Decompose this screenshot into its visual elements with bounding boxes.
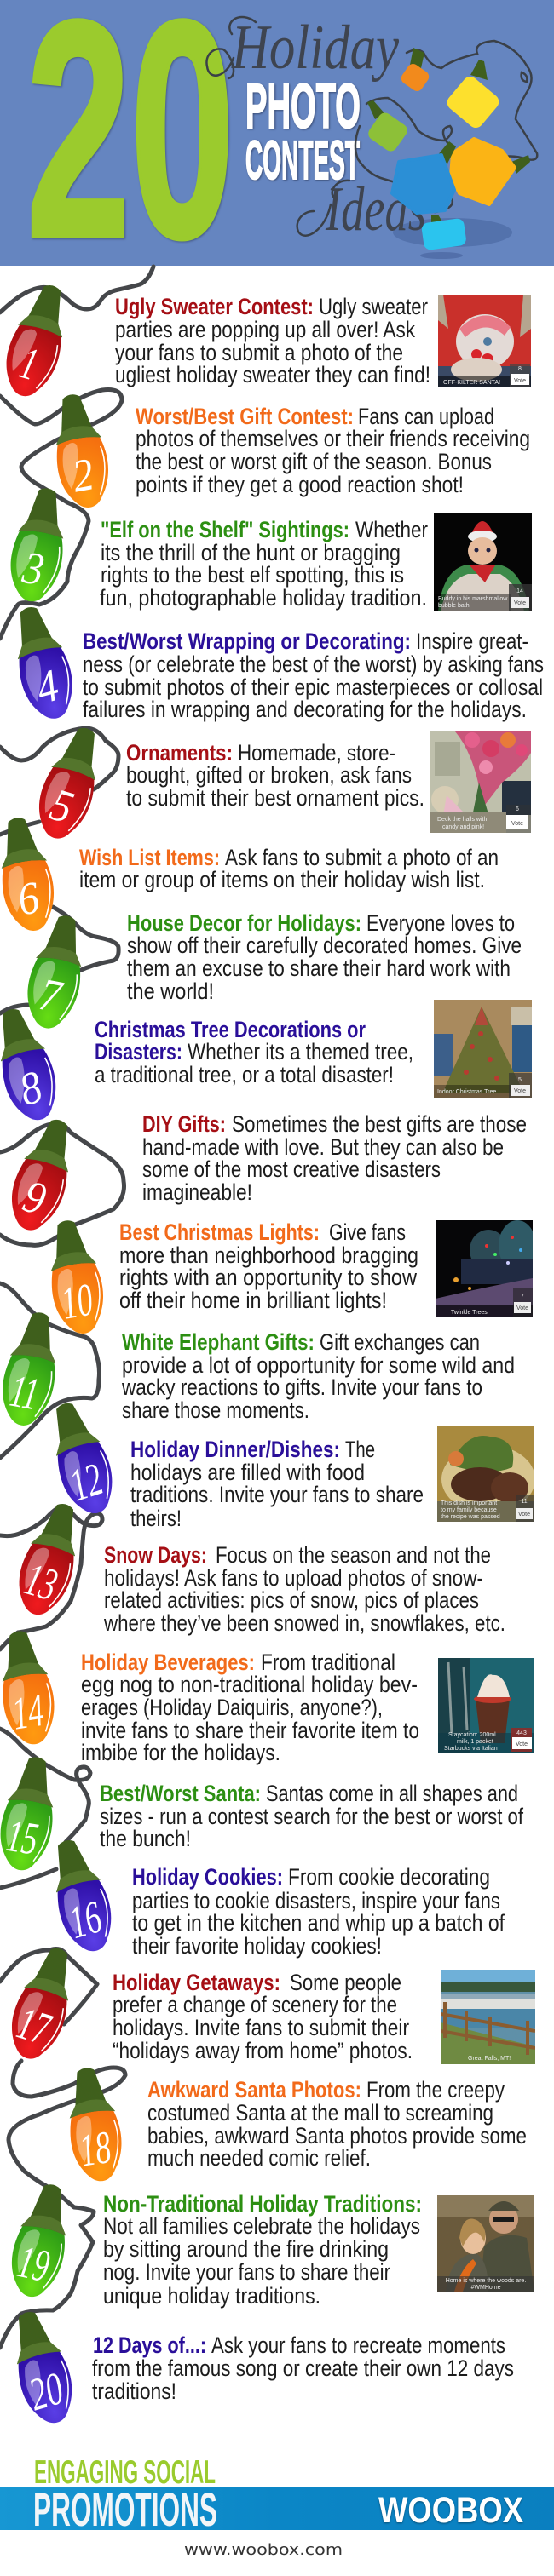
photo: elf on the shelf: Vote — [514, 600, 526, 606]
body text: holidays. Invite fans to submit their — [113, 2015, 409, 2040]
heading: Holiday Dinner/Dishes: — [130, 1437, 340, 1462]
icon: bulb 12: 12 — [64, 1453, 109, 1511]
photo: holiday beverage: Starbucks via Italian — [444, 1746, 498, 1752]
footer heading: promotions: PROMOTIONS — [33, 2482, 217, 2536]
body text: their favorite holiday cookies! — [132, 1933, 382, 1959]
icon: bulb 20: 20 — [23, 2362, 69, 2420]
icon: bulb 16: 16 — [63, 1890, 107, 1948]
photo: christmas lights: 7 — [521, 1294, 524, 1299]
icon: bulb 15 — [0, 1753, 62, 1874]
body text: Gift exchanges can — [320, 1329, 480, 1355]
heading: Awkward Santa Photos: — [147, 2077, 361, 2103]
body text: Whether — [355, 517, 428, 542]
body text — [142, 1111, 527, 1205]
body text — [83, 628, 544, 722]
heading: Ornaments: — [126, 740, 233, 766]
panel: idea 10 — [119, 1219, 536, 1317]
photo: christmas tree: Vote — [514, 1088, 526, 1094]
body text: the bunch! — [100, 1826, 191, 1851]
body text — [81, 1649, 419, 1765]
icon: bulb 7 — [20, 911, 92, 1033]
heading: Holiday Cookies: — [132, 1864, 283, 1890]
body text: traditions! — [92, 2378, 176, 2404]
body text: Focus on the season and not the — [216, 1542, 491, 1568]
panel: idea 12 — [130, 1426, 535, 1531]
body text: Whether its a themed tree, — [188, 1039, 413, 1064]
footer blue band — [0, 2487, 554, 2530]
icon: bulb 16 — [41, 1833, 121, 1958]
logo: woobox: WOOBOX — [378, 2490, 523, 2531]
icon: bulb 14 — [0, 1627, 61, 1748]
body text: your fans to submit a photo of the — [115, 340, 403, 365]
icon: bulb 20 — [2, 2305, 82, 2430]
body text: Not all families celebrate the holidays — [103, 2213, 420, 2239]
body text — [132, 1864, 505, 1959]
body text — [115, 294, 430, 387]
photo: getaway scenery — [441, 1970, 535, 2064]
photo: holiday beverage: Staycation: 200ml — [448, 1732, 496, 1738]
body text: “holidays away from home” photos. — [113, 2038, 413, 2063]
panel: idea 8 — [95, 1000, 532, 1098]
body text: nog. Invite your fans to share their — [103, 2259, 390, 2285]
icon: bulb 8 — [0, 1002, 66, 1127]
body text: invite fans to share their favorite item to — [81, 1718, 419, 1743]
body text: prefer a change of scenery for the — [113, 1992, 397, 2017]
body text — [126, 740, 424, 811]
panel: idea 11 — [121, 1329, 515, 1423]
heading: Holiday Beverages: — [81, 1649, 255, 1675]
photo: couple in camo: #WMHome — [470, 2285, 501, 2291]
heading: Best/Worst Santa: — [100, 1781, 261, 1806]
icon: bulb 14: 14 — [9, 1684, 47, 1740]
heading: DIY Gifts: — [142, 1111, 226, 1137]
heading: Wish List Items: — [79, 845, 220, 870]
heading: Best Christmas Lights: — [119, 1219, 320, 1245]
body text: rights to the best elf spotting, this is — [101, 562, 404, 588]
body text: From cookie decorating — [288, 1864, 490, 1890]
photo: ornaments: 6 — [516, 806, 519, 812]
panel: idea 17 — [113, 1970, 535, 2064]
icon: bulb 3: 3 — [19, 542, 48, 595]
panel: idea 4 — [83, 628, 544, 722]
word PHOTO: PHOTO — [245, 71, 361, 141]
body text: erages (Holiday Daiquiris, anyone?), — [81, 1695, 383, 1720]
icon: bulb 17 — [3, 1942, 84, 2066]
body text — [92, 2332, 514, 2404]
body text — [79, 845, 499, 892]
panel: idea 14 — [81, 1649, 534, 1765]
icon: bulb 8: 8 — [14, 1061, 48, 1116]
photo: holiday beverage: milk, 1 packet — [457, 1739, 493, 1745]
body text — [103, 2213, 420, 2309]
photo: ugly sweater: Vote — [514, 378, 526, 384]
icon: bulb 10: 10 — [57, 1273, 96, 1329]
body text: Give fans — [329, 1219, 406, 1245]
icon: bulb 6: 6 — [14, 871, 43, 926]
panel: idea 6 — [79, 845, 499, 892]
heading: Ugly Sweater Contest: — [115, 294, 314, 319]
body text: imbibe for the holidays. — [81, 1740, 280, 1765]
word Ideas: Ideas — [325, 175, 426, 244]
body text — [103, 1542, 505, 1636]
icon: bulb 1: 1 — [14, 336, 43, 390]
body text: fun, photographable holiday tradition. — [100, 585, 427, 611]
photo: holiday dish: This dish is important — [441, 1500, 497, 1506]
footer — [0, 2454, 554, 2559]
photo: couple in camo: Home is where the woods are. — [446, 2278, 526, 2284]
icon: bulb 15: 15 — [3, 1810, 42, 1865]
photo: getaway scenery: Great Falls, MT! — [468, 2056, 511, 2062]
body text: traditions. Invite your fans to share — [130, 1482, 424, 1507]
body text — [100, 1781, 523, 1851]
panel: idea 19 — [103, 2191, 534, 2309]
icon: bulb 9 — [3, 1113, 84, 1237]
icon: bulb 4: 4 — [31, 659, 64, 714]
panel: idea 1 — [115, 294, 531, 387]
photo: ornaments: candy and pink! — [442, 824, 484, 830]
body text: Ask fans to submit a photo of an — [225, 845, 499, 870]
photo: holiday beverage — [438, 1658, 534, 1753]
panel: idea 5 — [126, 731, 531, 833]
body text: Ugly sweater — [319, 294, 428, 319]
website url: www.woobox.com — [184, 2541, 343, 2559]
photo: holiday dish — [437, 1426, 534, 1522]
photo: christmas lights: Vote — [516, 1305, 528, 1311]
body text: its the thrill of the hunt or bragging — [101, 540, 401, 565]
photo: elf on the shelf: 14 — [516, 588, 523, 594]
panel: idea 20 — [92, 2332, 514, 2404]
heading: Snow Days: — [104, 1542, 207, 1568]
icon: bulb amber — [451, 139, 530, 204]
icon: bulb 13: 13 — [20, 1553, 63, 1610]
body text: the best or worst gift of the season. Bonus — [136, 449, 492, 474]
photo: ugly sweater — [438, 295, 531, 387]
body text: bought, gifted or broken, ask fans — [126, 762, 412, 788]
photo: elf on the shelf — [434, 513, 532, 611]
icon: bulb 5: 5 — [44, 778, 79, 834]
icon: bulb 18 — [60, 2064, 128, 2185]
body text: ugliest holiday sweater they can find! — [115, 362, 430, 387]
body text: unique holiday traditions. — [103, 2283, 320, 2309]
heading: Disasters: — [95, 1039, 182, 1064]
icon: bulb 19 — [4, 2179, 78, 2302]
icon: bulb 18: 18 — [76, 2121, 114, 2177]
heading: House Decor for Holidays: — [127, 910, 361, 936]
body text — [127, 910, 522, 1004]
icon: bulb 7: 7 — [36, 968, 66, 1023]
body text: some of the most creative disasters — [142, 1156, 441, 1182]
body text: theirs! — [130, 1506, 182, 1531]
body text — [130, 1437, 424, 1531]
icon: bulb 11: 11 — [7, 1365, 43, 1420]
panel: idea 18 — [147, 2077, 527, 2171]
panel: idea 2 — [136, 404, 530, 497]
body text — [121, 1329, 515, 1423]
body text: Inspire great- — [416, 628, 528, 654]
body text: The — [345, 1437, 375, 1462]
icon: bulb 12 — [39, 1396, 123, 1520]
photo: holiday dish: to my family because — [441, 1507, 497, 1513]
heading: 12 Days of...: — [93, 2332, 206, 2358]
photo: ugly sweater: 8 — [518, 366, 522, 372]
icon: bulb blue — [392, 141, 456, 213]
header banner — [0, 0, 554, 301]
heading: "Elf on the Shelf" Sightings: — [101, 517, 349, 542]
icon: bulb green — [366, 100, 410, 154]
photo: christmas tree: Indoor Christmas Tree — [437, 1089, 496, 1095]
icon: bulb 2: 2 — [68, 448, 97, 502]
word Ideas — [297, 175, 426, 244]
header banner: CONTEST — [245, 129, 360, 191]
heading: Best/Worst Wrapping or Decorating: — [83, 628, 411, 654]
body text — [136, 404, 530, 497]
heading: Christmas Tree Decorations or — [95, 1017, 366, 1042]
body text: Some people — [290, 1970, 401, 1995]
body text: much needed comic relief. — [147, 2145, 371, 2171]
panel: idea 7 — [127, 910, 522, 1004]
photo: holiday dish: 11 — [521, 1499, 528, 1505]
body text: From traditional — [261, 1649, 395, 1675]
icon: bulb 19: 19 — [14, 2235, 54, 2292]
icon: bulb yellow — [444, 60, 502, 131]
photo: couple in camo — [437, 2195, 534, 2292]
footer heading: engaging social: ENGAGING SOCIAL — [34, 2454, 216, 2491]
icon: bulb 17: 17 — [12, 1997, 57, 2055]
icon: bulb 6 — [0, 813, 61, 935]
icon: bulb 10 — [40, 1216, 110, 1338]
body text: rights with an opportunity to show — [119, 1265, 417, 1290]
body text: share those moments. — [122, 1397, 309, 1423]
photo: elf on the shelf: bubble bath! — [438, 603, 471, 609]
body text: the world! — [127, 978, 214, 1004]
photo: holiday beverage: 443 — [516, 1730, 527, 1736]
body text: off their home in brilliant lights! — [119, 1288, 387, 1313]
panel: idea 15 — [100, 1781, 523, 1851]
icon: bulb 2 — [45, 390, 115, 512]
heading — [95, 1017, 366, 1064]
body text: costumed Santa at the mall to screaming — [147, 2100, 493, 2126]
body text: parties are popping up all over! Ask — [115, 317, 415, 342]
panel: idea 13 — [103, 1542, 505, 1636]
panel: idea 3 — [100, 513, 532, 611]
body text — [113, 1970, 413, 2063]
photo: elf on the shelf: Buddy in his marshmallow — [438, 596, 508, 602]
body text: holidays are filled with food — [130, 1460, 365, 1485]
body text: item or group of items on their holiday wish list. — [79, 867, 485, 892]
heading: White Elephant Gifts: — [122, 1329, 315, 1355]
body text — [95, 1039, 413, 1087]
body text — [100, 517, 428, 611]
icon: bulb 9: 9 — [17, 1170, 52, 1225]
photo: christmas lights: Twinkle Trees — [451, 1310, 488, 1316]
photo: christmas tree: 5 — [518, 1077, 522, 1083]
body text: Fans can upload — [358, 404, 494, 429]
icon: bulb 11 — [0, 1308, 66, 1430]
body text: holidays! Ask fans to upload photos of snow- — [104, 1565, 483, 1591]
body text: From the creepy — [366, 2077, 505, 2103]
body text: Everyone loves to — [366, 910, 515, 936]
icon: bulb 13 — [10, 1497, 90, 1621]
body text: by sitting around the fire drinking — [103, 2236, 389, 2262]
panel: idea 16 — [132, 1864, 505, 1959]
photo: christmas tree — [434, 1000, 532, 1098]
body text: to submit their best ornament pics. — [126, 785, 424, 811]
heading: Worst/Best Gift Contest: — [136, 404, 354, 429]
heading: Non-Traditional Holiday Traditions: — [103, 2191, 422, 2217]
photo: ornaments: Deck the halls with — [437, 817, 487, 823]
body text: points if they get a good reaction shot! — [136, 472, 464, 497]
icon: bulb 4 — [3, 601, 82, 725]
photo: ornaments: Vote — [511, 821, 523, 827]
icon: bulb 3 — [5, 485, 72, 605]
string connecting the numbered bulbs — [0, 267, 153, 2348]
body text: related activities: pics of snow, pics of places — [104, 1587, 479, 1613]
body text — [119, 1219, 418, 1313]
photo: ugly sweater: OFF-KILTER SANTA! — [443, 380, 500, 386]
photo: holiday beverage: Vote — [516, 1741, 528, 1747]
body text: more than neighborhood bragging — [119, 1242, 418, 1268]
body text — [147, 2077, 527, 2171]
photo: ornaments — [430, 731, 531, 833]
icon: bulb cyan — [421, 215, 467, 250]
photo: holiday dish: Vote — [518, 1512, 530, 1517]
photo: christmas lights — [436, 1220, 533, 1317]
panel: idea 9 — [142, 1111, 527, 1205]
body text: Homemade, store- — [238, 740, 395, 766]
body text: egg nog to non-traditional holiday bev- — [81, 1672, 418, 1697]
body text: a traditional tree, or a total disaster! — [95, 1062, 394, 1087]
icon: bulb orange — [399, 48, 431, 94]
heading: Holiday Getaways: — [113, 1970, 280, 1995]
icon: bulb 1 — [0, 278, 78, 403]
body text: wacky reactions to gifts. Invite your fans to — [121, 1374, 482, 1400]
body text: imagineable! — [142, 1179, 252, 1205]
word Holiday: Holiday — [231, 13, 399, 83]
photo: holiday dish: the recipe was passed — [441, 1514, 500, 1520]
light string shadow — [393, 218, 512, 247]
icon: bulb 5 — [30, 721, 112, 846]
icon: string of lights — [355, 41, 537, 250]
